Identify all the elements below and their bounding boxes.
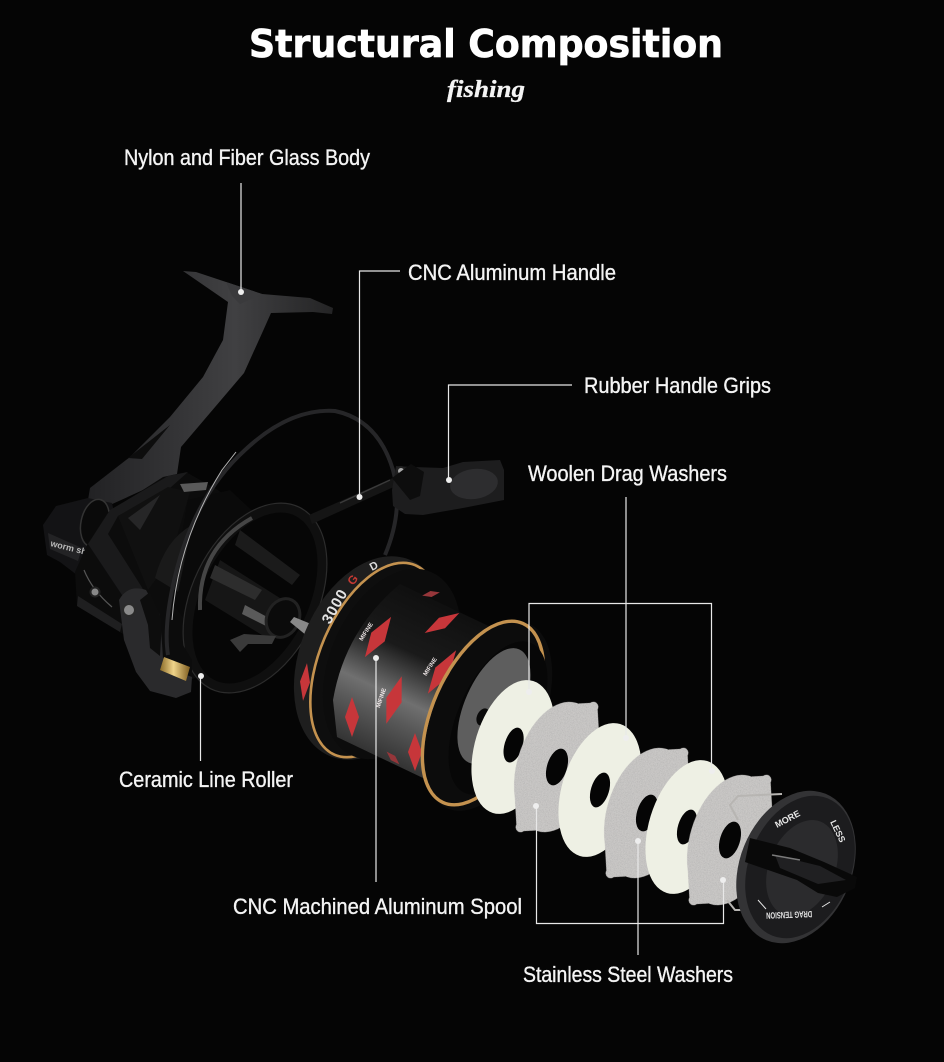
illustration: drag knob cap bbox=[714, 773, 878, 961]
label: Woolen Drag Washers: Woolen Drag Washers bbox=[528, 461, 727, 486]
illustration: aluminum spool: D bbox=[368, 559, 380, 574]
cap labels: MORE bbox=[773, 808, 802, 830]
label: Stainless Steel Washers: Stainless Steel Washers bbox=[523, 962, 733, 987]
wool washer 3 bbox=[630, 750, 744, 904]
steel washer 3 bbox=[670, 758, 790, 922]
label: Stainless Steel Washers bbox=[523, 803, 733, 987]
title: Structural Composition bbox=[249, 22, 723, 66]
label: CNC Machined Aluminum Spool: CNC Machined Aluminum Spool bbox=[233, 894, 522, 919]
illustration: spinning reel main body: worm shaft bbox=[49, 538, 99, 560]
wool washer 1 bbox=[456, 670, 570, 824]
logo diamonds: MIFINE bbox=[423, 657, 439, 677]
rear housing bbox=[43, 498, 120, 585]
logo diamonds: MIFINE bbox=[376, 688, 388, 709]
label: Woolen Drag Washers bbox=[526, 461, 727, 774]
illustration: spinning reel main body bbox=[43, 271, 504, 716]
rotor arm bbox=[88, 271, 333, 505]
handle arm bbox=[309, 477, 398, 524]
logo diamonds: MIFINE bbox=[359, 622, 375, 642]
illustration: drag knob cap: DRAG TENSION bbox=[766, 909, 812, 921]
shaft bbox=[290, 617, 316, 640]
steel washer 2 bbox=[587, 731, 707, 895]
illustration: drag knob cap: LESS bbox=[828, 818, 847, 844]
line roller (brass) bbox=[160, 624, 192, 681]
label: Ceramic Line Roller: Ceramic Line Roller bbox=[119, 767, 293, 792]
steel washer 1 bbox=[497, 685, 617, 849]
logo diamonds bbox=[298, 589, 463, 771]
gearbox body bbox=[75, 472, 300, 680]
illustration: aluminum spool bbox=[265, 533, 578, 830]
illustration: washers stack bbox=[456, 670, 790, 922]
front flange bbox=[398, 602, 578, 830]
label: CNC Aluminum Handle bbox=[356, 260, 616, 500]
label: CNC Aluminum Handle: CNC Aluminum Handle bbox=[408, 260, 616, 285]
bail arm joint bbox=[119, 588, 192, 698]
flange text: 3000 bbox=[319, 586, 352, 627]
label: CNC Machined Aluminum Spool bbox=[233, 655, 522, 919]
label: Rubber Handle Grips: Rubber Handle Grips bbox=[584, 373, 771, 398]
subtitle: fishing: fishing bbox=[447, 77, 525, 103]
handle grip bbox=[392, 460, 504, 515]
rotor cup bbox=[161, 486, 349, 710]
illustration: aluminum spool: G bbox=[344, 572, 361, 588]
rear flange bbox=[265, 533, 475, 783]
wool washer 2 bbox=[543, 713, 657, 867]
bail wire bbox=[167, 411, 397, 655]
label: Nylon and Fiber Glass Body: Nylon and Fiber Glass Body bbox=[124, 145, 370, 170]
label: Ceramic Line Roller bbox=[119, 673, 293, 792]
label: Rubber Handle Grips bbox=[446, 373, 771, 483]
label: Nylon and Fiber Glass Body bbox=[124, 145, 370, 295]
knob handle bbox=[745, 838, 857, 897]
